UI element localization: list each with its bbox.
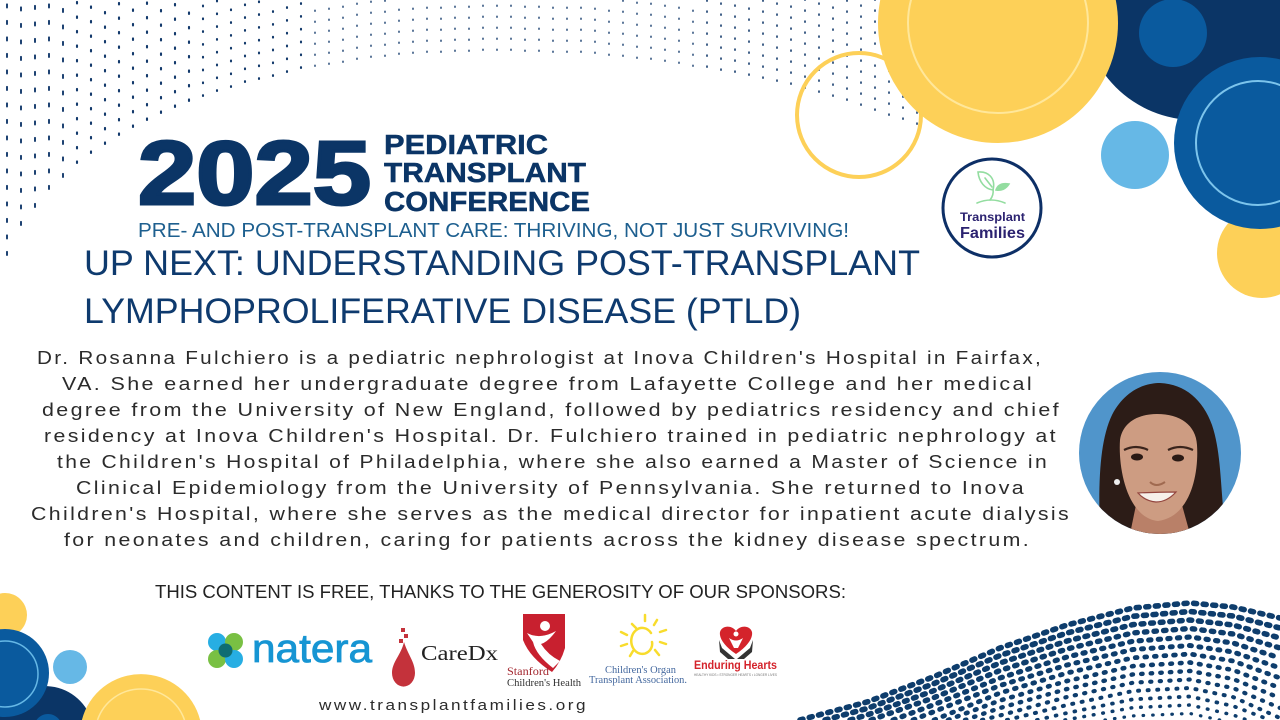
sponsor logo: Stanford Children's Health: Children's Health <box>507 677 581 689</box>
icon: Stanford shield <box>523 614 565 672</box>
logo wordmark <box>960 210 1025 242</box>
icon: heart and hands <box>719 627 753 659</box>
speaker biography: the Children's Hospital of Philadelphia, where she also earned a Master of Science in <box>57 452 1049 472</box>
sponsor logo: Stanford Children's Health <box>507 614 581 689</box>
speaker biography: Dr. Rosanna Fulchiero is a pediatric nephrologist at Inova Children's Hospital in Fairfax, <box>37 348 1043 368</box>
speaker biography: for neonates and children, caring for patients across the kidney disease spectrum. <box>64 530 1031 550</box>
speaker biography: residency at Inova Children's Hospital. Dr. Fulchiero trained in pediatric nephrology at <box>44 426 1058 446</box>
website URL: www.transplantfamilies.org <box>318 697 588 714</box>
speaker biography: VA. She earned her undergraduate degree from Lafayette College and her medical <box>62 374 1034 394</box>
year 2025: 2025 <box>138 124 371 224</box>
speaker biography: degree from the University of New England, followed by pediatrics residency and chief <box>42 400 1061 420</box>
decorative circles: bottom left <box>0 593 200 720</box>
sponsor logo: Enduring Hearts <box>694 627 778 677</box>
sponsor logo: Enduring Hearts: Enduring Hearts <box>694 660 777 672</box>
session heading <box>84 244 920 331</box>
speaker biography <box>31 348 1071 550</box>
sponsor logo: CareDx <box>392 628 499 687</box>
icon: CareDx drop <box>392 628 415 687</box>
icon: Natera clover <box>208 633 243 668</box>
logo wordmark: Transplant <box>960 210 1025 224</box>
sponsor logo: Natera <box>208 627 373 671</box>
conference name: TRANSPLANT <box>384 157 586 188</box>
sponsor logo: Enduring Hearts: HEALTHY KIDS • STRONGER HEARTS • LONGER LIVES <box>694 673 778 677</box>
sponsor logo: Natera: natera <box>252 627 373 671</box>
conference name <box>384 129 590 217</box>
icon: Transplant Families logo <box>943 159 1041 257</box>
decorative dotted wave: bottom right <box>800 603 1280 720</box>
speaker portrait <box>1079 372 1241 534</box>
conference name: PEDIATRIC <box>384 129 548 160</box>
decorative circles: top right <box>797 0 1280 298</box>
conference name: CONFERENCE <box>384 186 590 217</box>
sponsor logo: Children's Organ Transplant Association: Children's Organ <box>605 665 677 676</box>
speaker biography: Clinical Epidemiology from the University of Pennsylvania. She returned to Inova <box>76 478 1026 498</box>
logo wordmark: Families <box>960 225 1025 242</box>
icon: sun <box>621 615 666 656</box>
sponsor logo: Children's Organ Transplant Association: Transplant Association. <box>589 675 687 686</box>
conference logotype <box>138 124 590 224</box>
conference tagline: PRE- AND POST-TRANSPLANT CARE: THRIVING, NOT JUST SURVIVING! <box>138 220 849 242</box>
sponsor logo: CareDx: CareDx <box>421 641 499 665</box>
sponsor logo: Children's Organ Transplant Association <box>589 615 687 686</box>
sponsor logo: Stanford Children's Health: Stanford <box>507 664 549 678</box>
speaker biography: Children's Hospital, where she serves as the medical director for inpatient acute dialysis <box>31 504 1071 524</box>
sponsors heading: THIS CONTENT IS FREE, THANKS TO THE GENEROSITY OF OUR SPONSORS: <box>155 582 846 602</box>
session heading: UP NEXT: UNDERSTANDING POST-TRANSPLANT <box>84 244 920 283</box>
session heading: LYMPHOPROLIFERATIVE DISEASE (PTLD) <box>84 292 801 331</box>
icon: sprout <box>977 172 1009 203</box>
facial features <box>1124 447 1193 502</box>
